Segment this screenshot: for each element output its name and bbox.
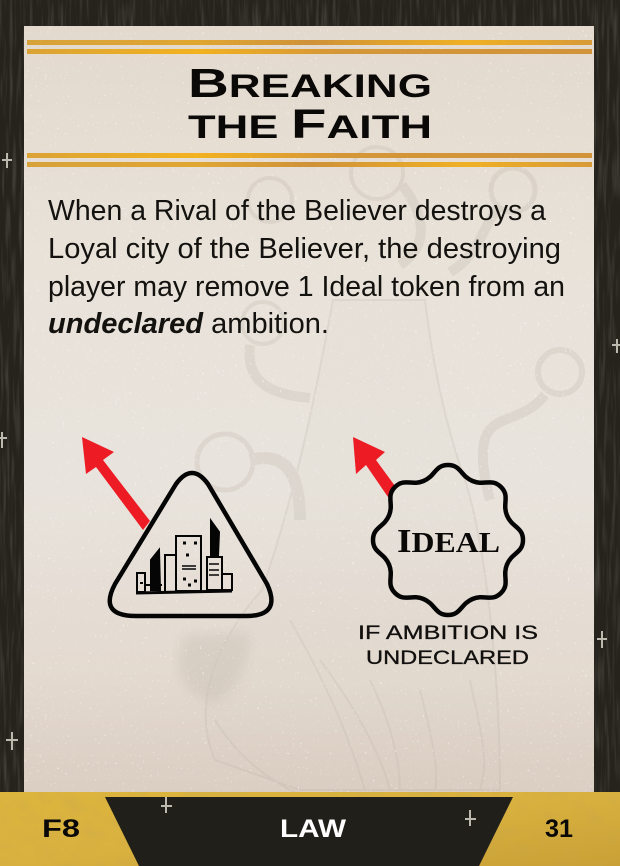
icon: loyal city triangle <box>110 473 271 616</box>
icon: red arrow from ideal <box>353 437 395 497</box>
rule text <box>48 195 565 340</box>
footer band <box>0 792 620 866</box>
decorative crosses <box>0 153 620 826</box>
lower gold double rule <box>27 153 592 167</box>
icon: red arrow from city <box>82 437 150 530</box>
rule text: player may remove 1 Ideal token from an <box>48 271 565 303</box>
footer centre label: LAW <box>280 815 346 843</box>
caption <box>358 623 538 669</box>
city skyline <box>136 521 232 593</box>
title <box>188 60 432 147</box>
title: THE F AITH <box>188 101 432 147</box>
footer right number: 31 <box>545 815 573 843</box>
icon: ideal token: IDEAL <box>397 523 500 560</box>
rule text: undeclared ambition. <box>48 308 329 340</box>
rule text: When a Rival of the Believer destroys a <box>48 195 547 227</box>
rule text: Loyal city of the Believer, the destroying <box>48 233 561 265</box>
title: B REAKING <box>188 60 432 106</box>
caption: IF AMBITION IS <box>358 623 538 644</box>
footer left code: F8 <box>42 815 80 843</box>
footer centre trapezoid <box>105 797 513 866</box>
top gold double rule <box>27 40 592 54</box>
ghost illustration: tentacled creature <box>178 147 582 795</box>
icon: ideal token <box>373 465 523 615</box>
caption: UNDECLARED <box>366 648 529 669</box>
